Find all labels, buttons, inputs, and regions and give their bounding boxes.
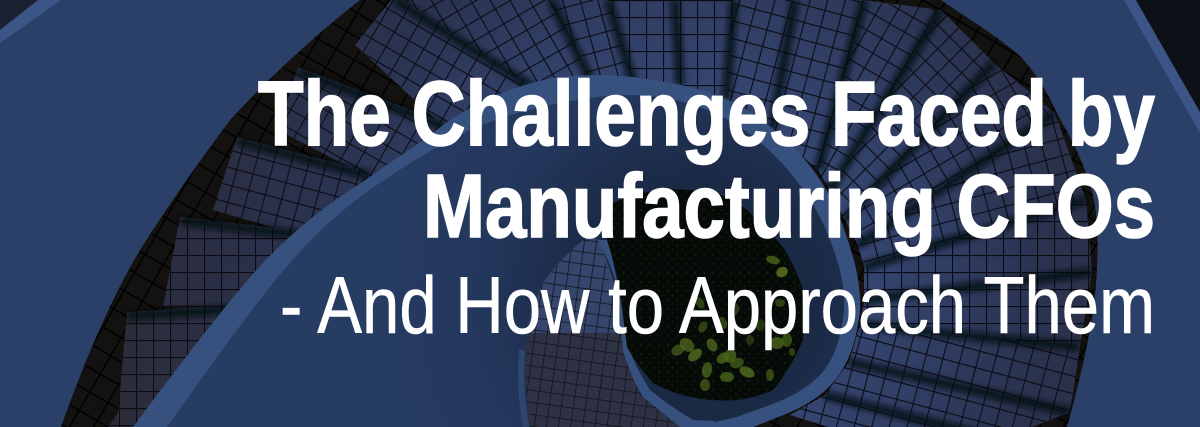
plant leaves xyxy=(669,254,795,391)
inner stair tiles xyxy=(521,237,682,427)
inner banister: flat top xyxy=(167,95,844,427)
well ring: light band xyxy=(598,240,715,427)
title xyxy=(258,63,1155,351)
outer wall: left xyxy=(0,0,360,427)
inner banister: light band xyxy=(133,75,860,427)
central well with plants xyxy=(607,190,804,401)
outer wall: right xyxy=(941,0,1200,427)
